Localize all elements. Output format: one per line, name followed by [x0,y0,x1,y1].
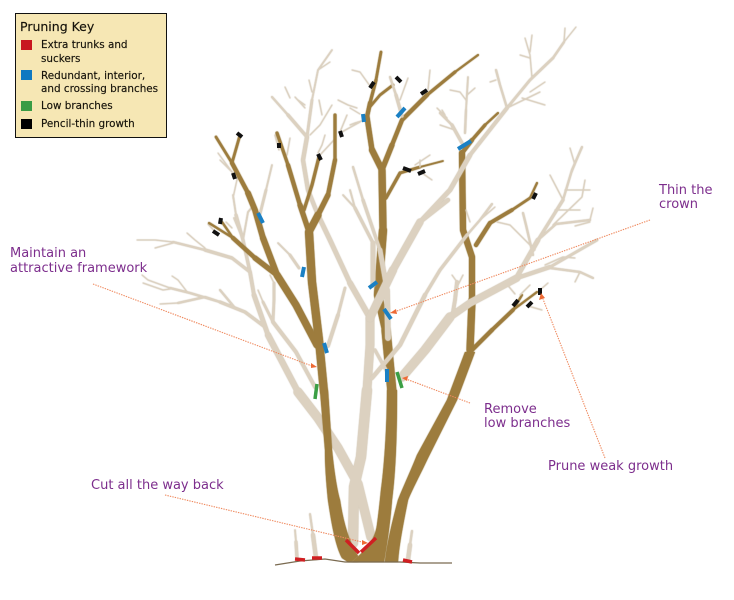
tree: tan branches in front of the trunks [295,27,597,560]
label: thin the crown: crown [659,197,698,212]
label: cut all the way back: Cut all the way back [91,478,224,493]
legend item: blue: and crossing branches [41,83,158,95]
arrow: thin the crown [390,220,650,314]
arrow: cut all the way back [165,495,368,545]
ground line [275,559,452,565]
tree: left trunk with its kept branches [209,115,358,562]
legend item: red: suckers [41,53,80,65]
arrow: maintain framework [93,284,317,368]
legend item: green: Low branches [41,100,113,112]
label: remove low branches: low branches [484,416,571,431]
label: remove low branches: Remove [484,402,537,417]
panel: pruning key [16,14,166,138]
label: prune weak growth: Prune weak growth [548,459,673,474]
arrow: prune weak growth [539,293,605,458]
label: thin the crown: Thin the [658,183,712,198]
legend heading: Pruning Key [20,19,95,34]
arrow: remove low branches [402,376,470,403]
legend item: blue [21,70,158,95]
label: maintain an attractive framework: Maintain an [10,246,86,261]
tree: right trunk with its kept branches [385,113,537,562]
pruning cut marks: black, pencil-thin growth [213,77,540,307]
label: maintain an attractive framework: attractive framework [10,261,148,276]
pruning cut marks: red, extra trunks and suckers [295,538,412,562]
pruning cut marks: blue, redundant branches [258,108,471,382]
pruning cut marks: green, low branches [315,372,402,399]
legend item: red: Extra trunks and [41,39,128,51]
tree: tan branches behind the kept trunks [137,50,371,543]
tree: middle trunk with its kept branches [352,52,478,562]
legend item: black: Pencil-thin growth [41,118,135,130]
legend item: red [21,39,128,65]
legend item: blue: Redundant, interior, [41,70,145,82]
